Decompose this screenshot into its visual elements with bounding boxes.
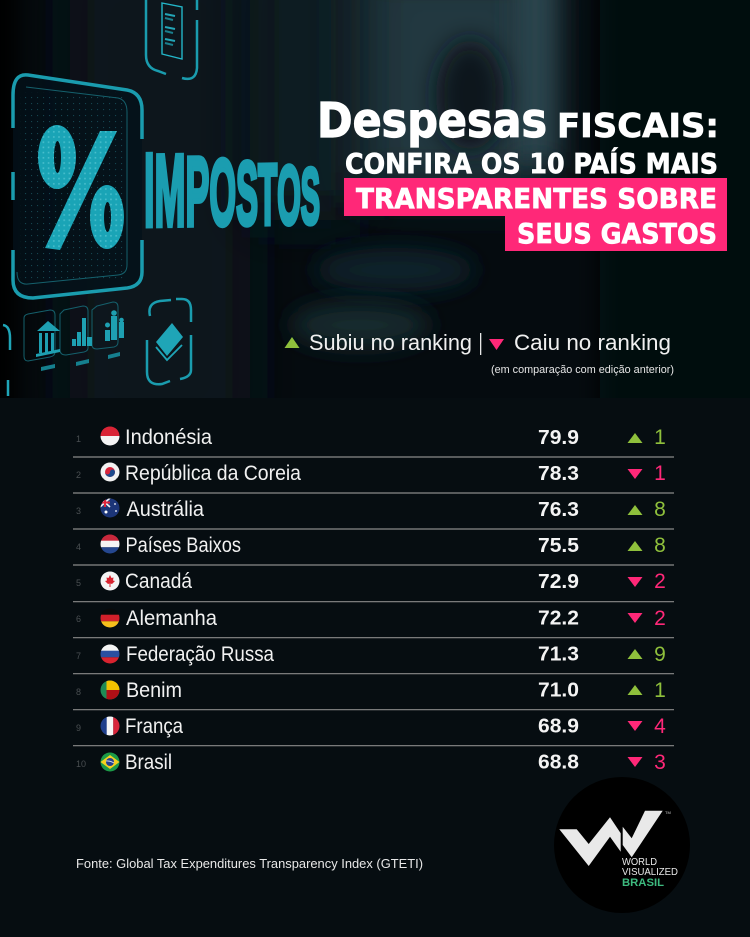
row 7: 71.3: [538, 644, 579, 666]
row 8: 1: [654, 679, 666, 702]
logo: World Visualized Brasil: BRASIL: [622, 877, 664, 889]
row 6: 72.2: [538, 608, 579, 630]
row 6: 6: [76, 614, 81, 624]
logo: World Visualized Brasil: TM: [665, 810, 671, 815]
icon: building, chart and people tiles: [24, 302, 124, 371]
row 9: 9: [76, 723, 81, 733]
row 1: 79.9: [538, 427, 579, 449]
title: Despesas fiscais: [317, 93, 719, 149]
row 3: [76, 498, 665, 518]
legend: Subiu no ranking: [309, 330, 472, 355]
row 4: [76, 534, 665, 554]
row 2: República da Coreia: [125, 462, 301, 485]
title: Despesas fiscais: FISCAIS:: [557, 106, 719, 145]
logo mark: [559, 817, 621, 866]
percent sign: [38, 125, 124, 250]
row 9: França: [125, 715, 183, 738]
row 3: Austrália: [126, 498, 204, 521]
row 1: 1: [654, 426, 666, 449]
icon: clipboard panel: [146, 0, 197, 79]
row 7: 7: [76, 651, 81, 661]
row 8: 71.0: [538, 680, 579, 702]
icon: percent panel: [13, 75, 142, 298]
row 10: 3: [654, 751, 666, 774]
row 3: 8: [654, 498, 666, 521]
source note: Fonte: Global Tax Expenditures Transparency Index (GTETI): [76, 856, 423, 871]
row 1: 1: [76, 434, 81, 444]
logo: World Visualized Brasil: [554, 777, 690, 913]
title: Despesas fiscais: Despesas: [317, 93, 547, 149]
row 6: 2: [654, 607, 666, 630]
ranking table: [73, 426, 674, 774]
logo: World Visualized Brasil: VISUALIZED: [622, 866, 678, 878]
row 2: 1: [654, 462, 666, 485]
row 4: Países Baixos: [126, 534, 241, 557]
row 5: 5: [76, 578, 81, 588]
highlighted subtitle: SEUS GASTOS: [517, 217, 717, 250]
logo: World Visualized Brasil: WORLD: [622, 856, 657, 868]
highlighted subtitle: TRANSPARENTES SOBRE: [356, 182, 717, 215]
row 7: 9: [654, 643, 666, 666]
row 9: 68.9: [538, 716, 579, 738]
row 10: Brasil: [125, 751, 172, 774]
row 1: Indonésia: [125, 426, 212, 449]
row 2: [76, 462, 666, 485]
row 4: 75.5: [538, 535, 579, 557]
row 8: Benim: [126, 679, 182, 702]
row 9: 4: [654, 715, 666, 738]
row 5: 2: [654, 570, 666, 593]
row 2: 2: [76, 470, 81, 480]
row 4: 8: [654, 534, 666, 557]
row 10: 10: [76, 759, 86, 769]
legend: (em comparação com edição anterior): [491, 364, 674, 376]
row 8: 8: [76, 687, 81, 697]
title block: [317, 93, 727, 251]
hero photo background: [0, 0, 600, 398]
row 10: [76, 752, 665, 772]
highlighted subtitle: [344, 178, 727, 251]
subtitle line: CONFIRA OS 10 PAÍS MAIS: [345, 146, 718, 180]
row 7: [76, 643, 666, 666]
row 5: Canadá: [125, 570, 192, 593]
legend: Caiu no ranking: [514, 330, 671, 355]
row 5: [76, 572, 665, 590]
legend: [284, 330, 674, 376]
row 7: Federação Russa: [126, 643, 274, 666]
row 3: 3: [76, 506, 81, 516]
row 8: [76, 680, 665, 700]
row 2: 78.3: [538, 463, 579, 485]
row 9: [76, 715, 666, 738]
row 1: [76, 426, 665, 446]
row 10: 68.8: [538, 752, 579, 774]
row 6: Alemanha: [126, 607, 217, 630]
heading: IMPOSTOS on screen: IMPOSTOS: [144, 129, 320, 249]
row 5: 72.9: [538, 571, 579, 593]
row 3: 76.3: [538, 499, 579, 521]
row 6: [76, 610, 665, 628]
row 4: 4: [76, 542, 81, 552]
icon: document panel: [3, 299, 191, 396]
